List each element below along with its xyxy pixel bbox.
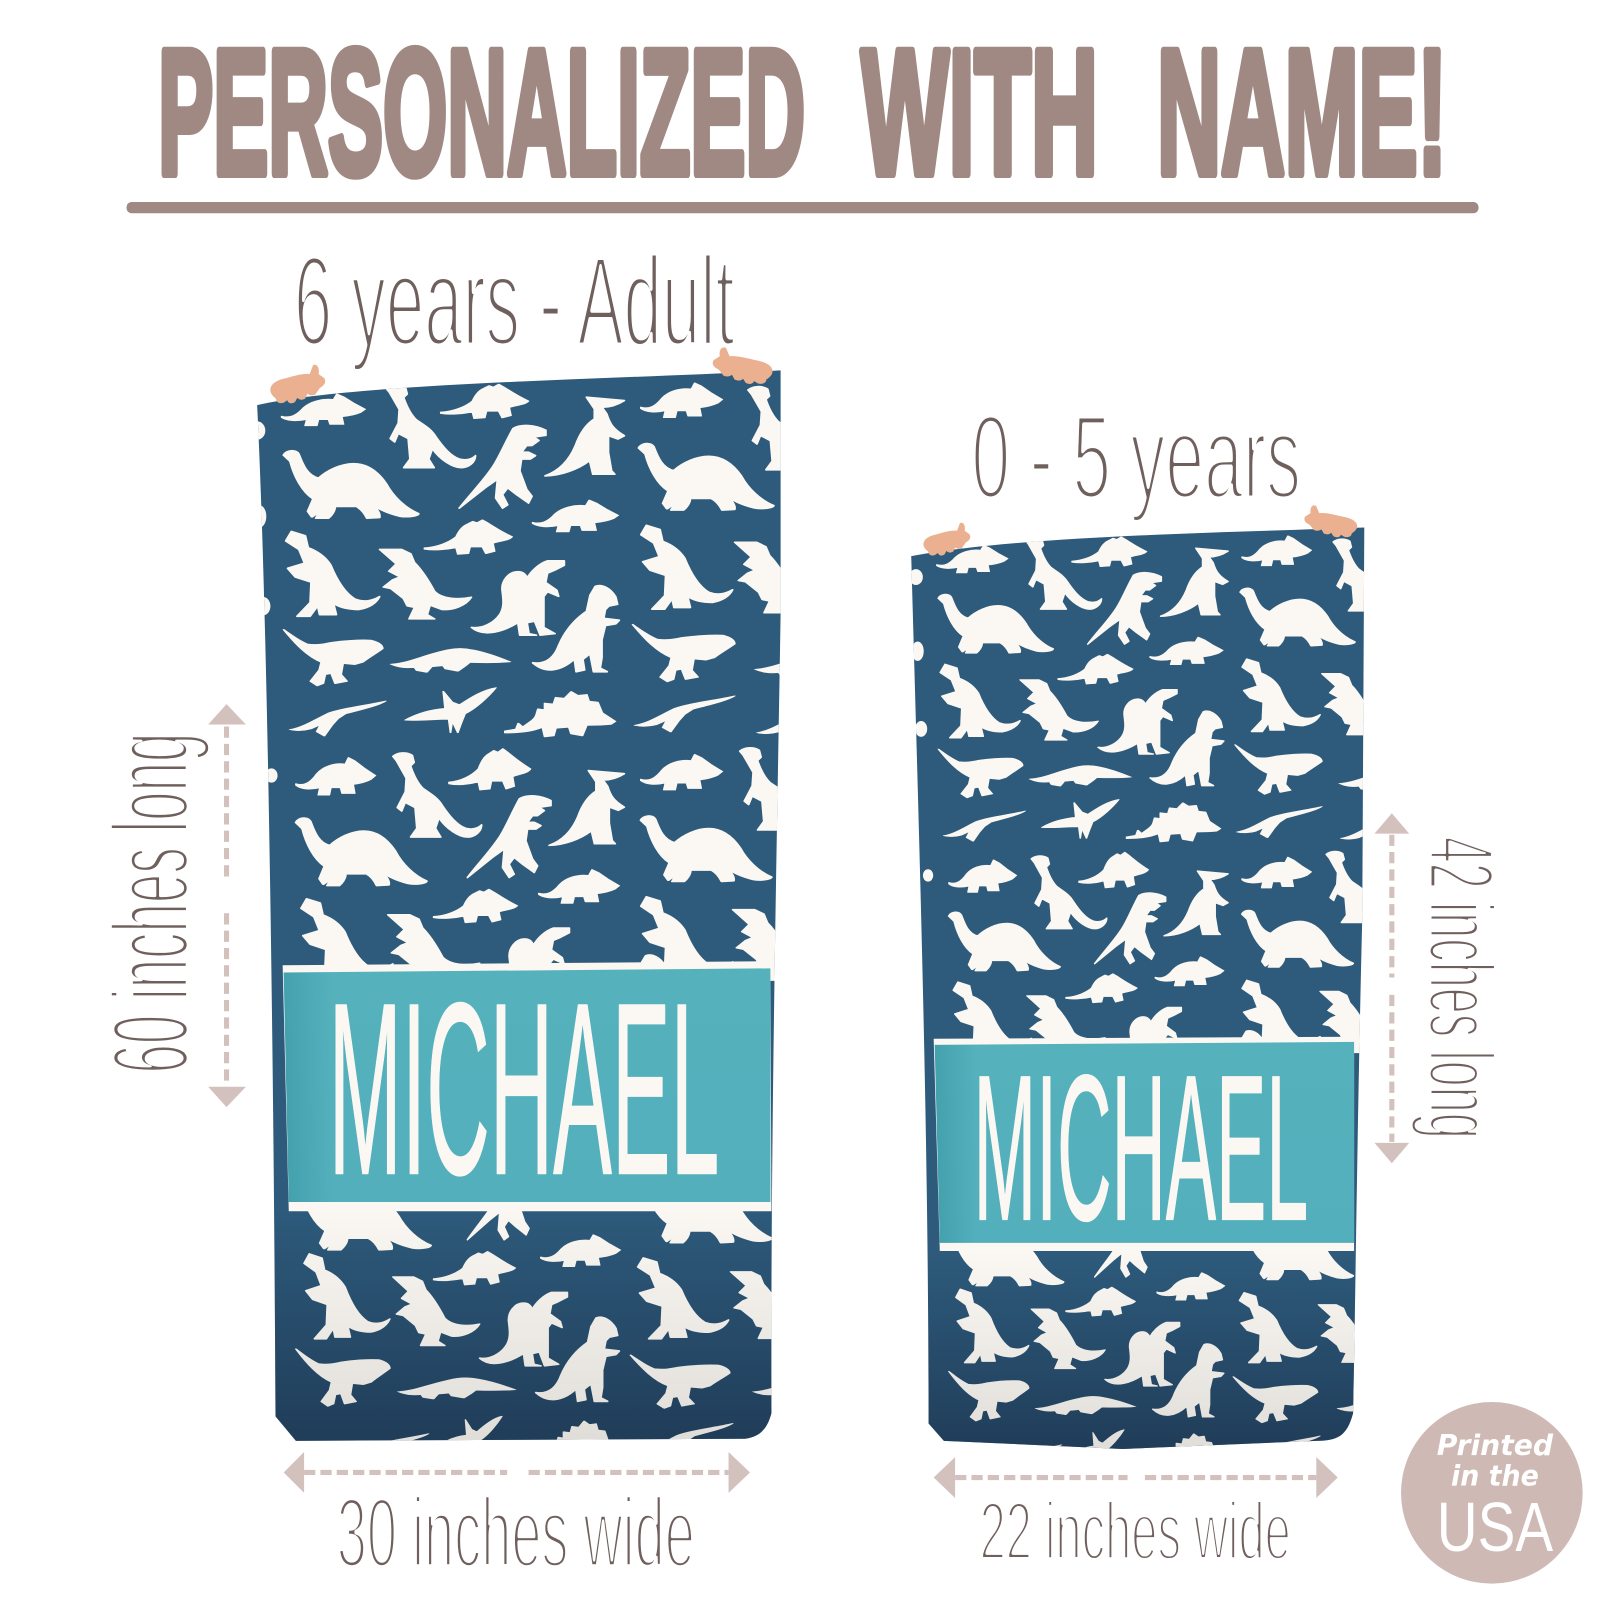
name band <box>283 951 771 1225</box>
dinosaur shading <box>295 1276 772 1440</box>
dinosaur pattern <box>250 383 874 1464</box>
towel fabric <box>257 370 781 1441</box>
towel fabric <box>911 528 1364 1449</box>
badge: printed in the USA: USA <box>1437 1488 1554 1566</box>
arrow: 22 inches width <box>934 1457 1338 1498</box>
label: 42 inches long: 42 inches long <box>1410 837 1512 1139</box>
badge: printed in the USA <box>1401 1402 1583 1584</box>
badge: printed in the USA: in the <box>1451 1459 1539 1493</box>
title: WITH <box>861 12 1098 211</box>
label: 22 inches wide: 22 inches wide <box>980 1486 1291 1577</box>
dinosaur shading <box>948 1310 1354 1448</box>
arrow: 30 inches width <box>284 1452 750 1493</box>
hand: left <box>923 523 970 556</box>
panel: large towel: MICHAEL <box>329 951 719 1225</box>
badge: printed in the USA: Printed <box>1437 1428 1554 1462</box>
label: 30 inches wide: 30 inches wide <box>337 1477 695 1587</box>
hand: left <box>270 365 325 403</box>
title: PERSONALIZED <box>158 12 805 211</box>
lower fabric shading <box>928 1305 1355 1449</box>
panel: small towel <box>908 505 1441 1471</box>
name band <box>934 1031 1354 1263</box>
dinosaur pattern <box>910 536 1441 1471</box>
arrow: 60 inches length <box>208 704 246 1107</box>
arrow: 42 inches length <box>1374 813 1409 1163</box>
lower fabric shading <box>274 1268 772 1441</box>
hand: right <box>1304 505 1357 537</box>
heading: 6 years - Adult: 6 years - Adult <box>294 231 735 373</box>
panel: large towel <box>250 347 874 1464</box>
heading: 0 - 5 years: 0 - 5 years <box>971 392 1301 524</box>
title underline <box>127 202 1479 213</box>
hand: right <box>713 347 773 384</box>
text: 60 inches long <box>90 733 211 1073</box>
